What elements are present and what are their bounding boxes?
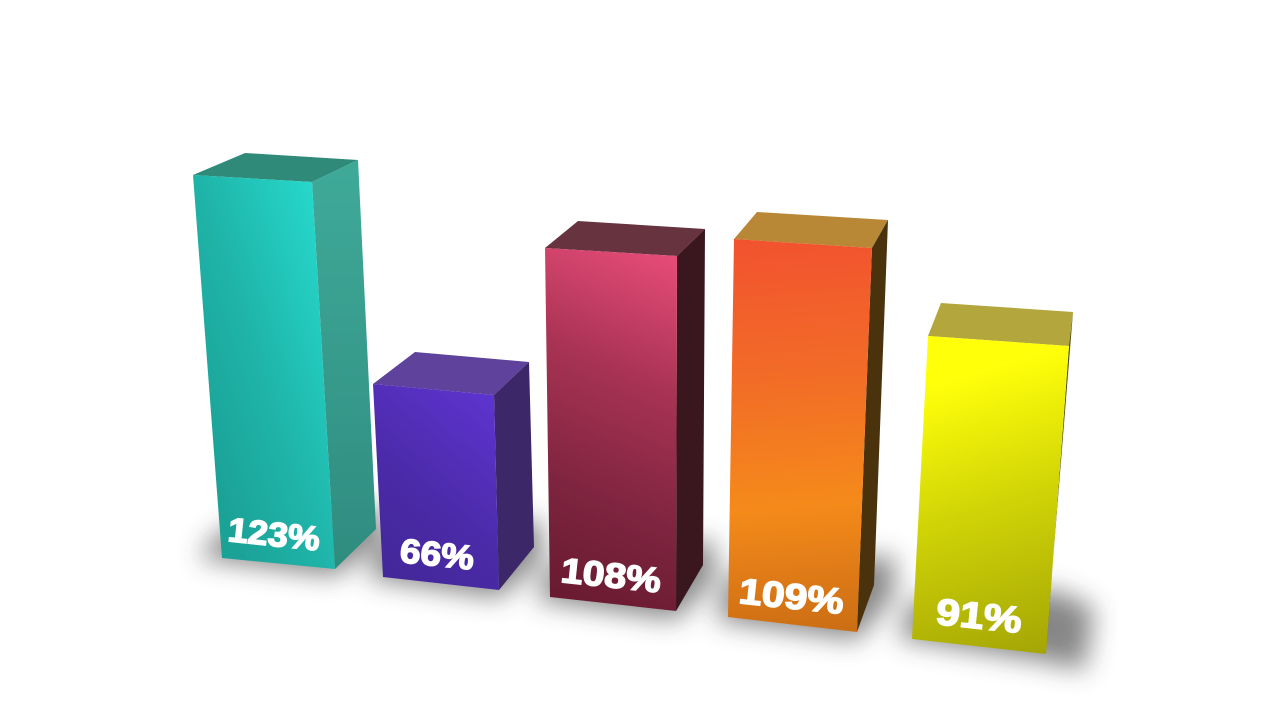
value label: 91% xyxy=(934,592,1024,641)
bar: 66% xyxy=(373,352,534,590)
value label: 109% xyxy=(737,571,846,622)
value label: 123% xyxy=(226,511,322,558)
bar: 123% xyxy=(193,153,376,569)
value label: 66% xyxy=(398,532,476,577)
ground shadows xyxy=(198,505,1094,670)
bar: 108% xyxy=(545,221,705,611)
bar: 109% xyxy=(728,212,888,632)
value label: 108% xyxy=(559,550,663,600)
bar: 91% xyxy=(912,303,1073,654)
